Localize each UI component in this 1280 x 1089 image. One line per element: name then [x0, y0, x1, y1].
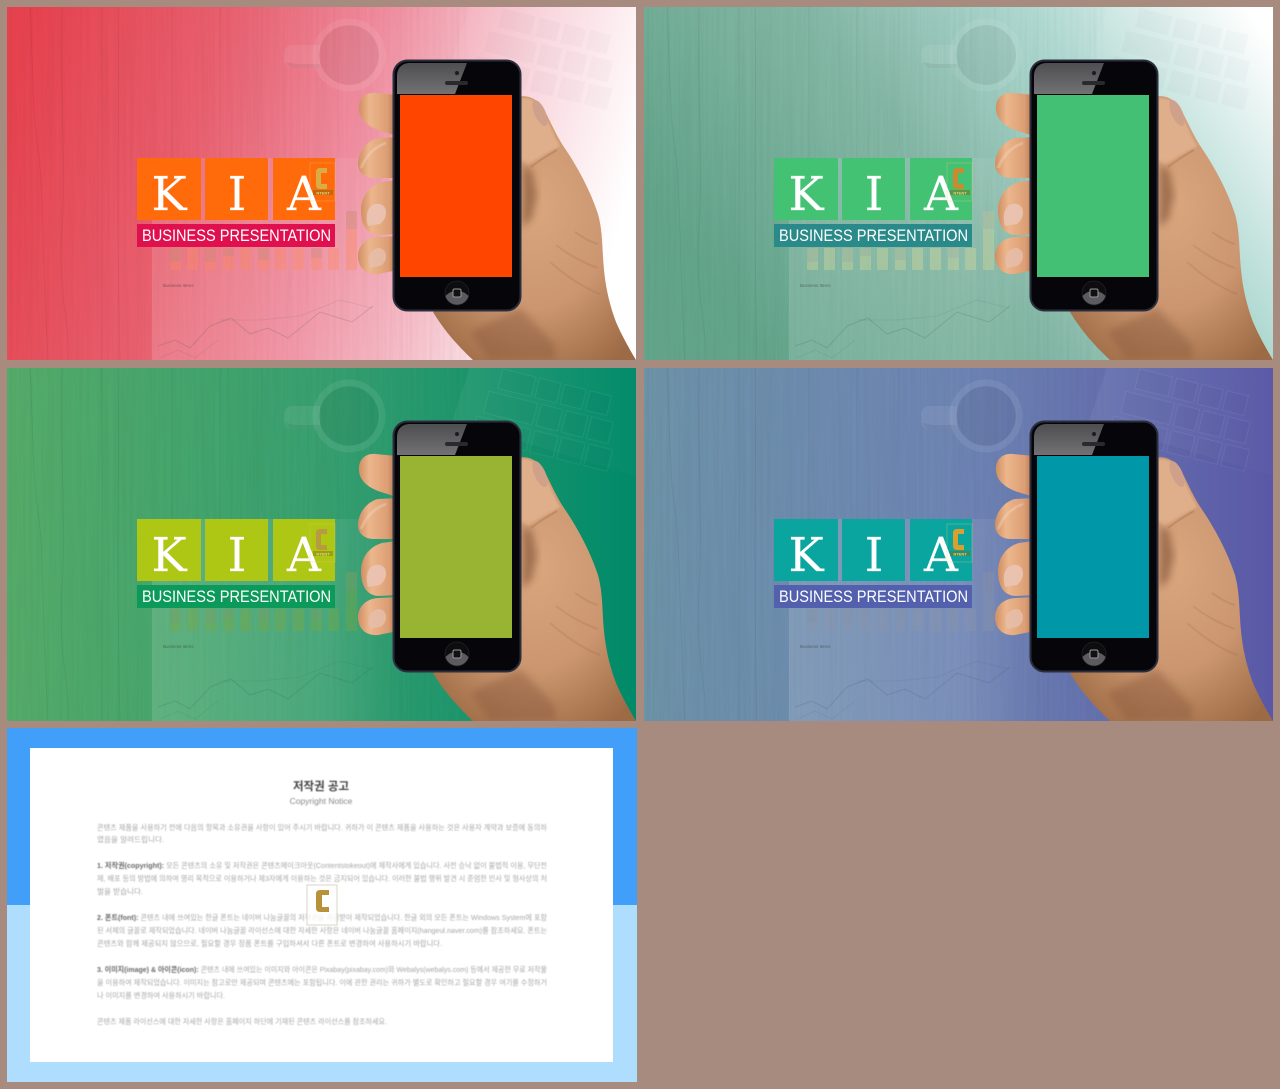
banner: BUSINESS PRESENTATION: [142, 227, 331, 245]
tile I: I: [228, 167, 246, 222]
phone screen: [1037, 95, 1149, 277]
banner: BUSINESS PRESENTATION: [779, 227, 968, 245]
tile I: [842, 519, 905, 583]
desk backdrop: mug, keyboard, chart: [666, 7, 1016, 360]
tile A: [910, 519, 972, 583]
tile K: K: [151, 167, 187, 222]
notice subtitle: Copyright Notice: [290, 796, 353, 806]
panel: green slide: [7, 366, 636, 721]
phone: [394, 60, 520, 310]
banner: BUSINESS PRESENTATION: [779, 588, 968, 606]
panel: copyright notice: [7, 728, 637, 1082]
tile K: K: [788, 167, 824, 222]
notice body text: 였음을 알려드립니다.: [97, 834, 164, 844]
tile A: [910, 158, 972, 222]
notice body text: 된 서체의 글꼴로 제작되었습니다. 네이버 나눔글꼴 라이선스에 대한 자세한 사항은 네이버 나눔글꼴 홈페이지(hangeul.naver.com)를 참조하세요. 폰트는: [97, 925, 547, 935]
phone: [1030, 60, 1158, 310]
phone: [394, 422, 520, 672]
tile I: I: [865, 528, 883, 583]
logo stamp: NTENT: [953, 552, 967, 556]
tile I: I: [228, 528, 246, 583]
logo stamp: [310, 524, 335, 562]
desk backdrop: mug, keyboard, chart: [644, 366, 1273, 721]
tile I: I: [865, 167, 883, 222]
mint gradient background: [644, 7, 1273, 360]
phone: [1030, 422, 1158, 672]
notice body text: 3. 이미지(image) & 아이콘(icon): 콘텐츠 내에 쓰여있는 이미지와 아이콘은 Pixabay(pixabay.com)와 Webalys(webalys.com) 등에서 제공한 무료 저작물: [97, 964, 547, 974]
notice body text: 을 이용하여 제작되었습니다. 이미지는 참고로만 제공되며 콘텐츠에는 포함됩니다. 이에 관한 권리는 귀하가 별도로 확인하고 필요할 경우 여기를 수정하거: [97, 977, 547, 987]
tile I: [205, 519, 268, 583]
bottom light blue band: [7, 905, 637, 1082]
panel: blue slide: [644, 366, 1273, 721]
phone screen: [400, 95, 512, 277]
logo stamp: NTENT: [953, 190, 967, 196]
tile K: K: [151, 528, 187, 583]
top blue band: [7, 728, 637, 905]
notice body text: 콘텐츠 제품을 사용하기 전에 다음의 항목과 소유권을 사항이 있어 주시기 바랍니다. 귀하가 이 콘텐츠 제품을 사용하는 것은 사용자 계약과 보증에 동의하: [97, 822, 547, 832]
red gradient background: [7, 7, 636, 360]
notice body text: 2. 폰트(font): 콘텐츠 내에 쓰여있는 한글 폰트는 네이버 나눔글꼴의 저작권을 제공받아 제작되었습니다. 한글 외의 모든 폰트는 Windows System에 포함: [97, 912, 547, 922]
tile A: A: [923, 528, 959, 583]
logo stamp: [947, 524, 972, 562]
hand: [358, 454, 636, 721]
notice body text: 콘텐츠 제품 라이선스에 대한 자세한 사항은 홈페이지 하단에 기재된 콘텐츠 라이선스를 참조하세요.: [97, 1016, 387, 1026]
panel: red slide: [7, 5, 636, 360]
tile A: A: [923, 167, 959, 222]
green gradient background: [7, 368, 636, 721]
white notice card: [30, 748, 613, 1062]
notice logo stamp: [307, 885, 337, 925]
tile K: [137, 158, 201, 222]
hand: [995, 454, 1273, 721]
logo stamp: [947, 163, 972, 201]
tile K: [774, 519, 838, 583]
chart label: Business Items: [800, 283, 831, 288]
tile A: A: [286, 167, 322, 222]
logo stamp: [310, 163, 335, 201]
logo stamp: NTENT: [316, 552, 330, 556]
tile I: [205, 158, 268, 222]
chart label: Business Items: [163, 644, 194, 649]
notice body text: 1. 저작권(copyright): 모든 콘텐츠의 소유 및 저작권은 콘텐츠메이크아웃(Contentstokeout)에 제작사에게 있습니다. 사전 승낙 없이 불법적 이용, 무단전: [97, 860, 547, 870]
tile K: [137, 519, 201, 583]
notice body text: 콘텐츠와 함께 제공되지 않으므로, 필요할 경우 정품 폰트를 구입하셔서 다른 폰트로 변경하여 사용하시기 바랍니다.: [97, 938, 442, 948]
notice body text: 벌을 받습니다.: [97, 886, 143, 896]
notice title: 저작권 공고: [293, 779, 349, 793]
tile K: K: [788, 528, 824, 583]
hand: [358, 93, 636, 360]
banner: BUSINESS PRESENTATION: [142, 588, 331, 606]
tile A: A: [286, 528, 322, 583]
desk backdrop: mug, keyboard, chart: [30, 7, 432, 360]
phone screen: [1037, 456, 1149, 638]
notice body text: 나 이미지를 변경하여 사용하시기 바랍니다.: [97, 990, 225, 1000]
panel: mint slide: [644, 5, 1273, 360]
notice body text: 재, 배포 등의 방법에 의하여 영리 목적으로 이용하거나 제3자에게 이용하는 것은 금지되어 있습니다. 이러한 불법 행위 발견 시 준엄한 민사 및 형사상의 처: [97, 873, 547, 883]
hand: [995, 93, 1273, 360]
blue gradient background: [644, 368, 1273, 721]
logo stamp: NTENT: [316, 190, 330, 196]
tile A: [273, 158, 335, 222]
chart label: Business Items: [163, 283, 194, 288]
notice body text: [97, 822, 547, 1026]
tile A: [273, 519, 335, 583]
desk backdrop: mug, keyboard, chart: [7, 366, 636, 721]
phone screen: [400, 456, 512, 638]
chart label: Business Items: [800, 644, 831, 649]
tile K: [774, 158, 838, 222]
tile I: [842, 158, 905, 222]
